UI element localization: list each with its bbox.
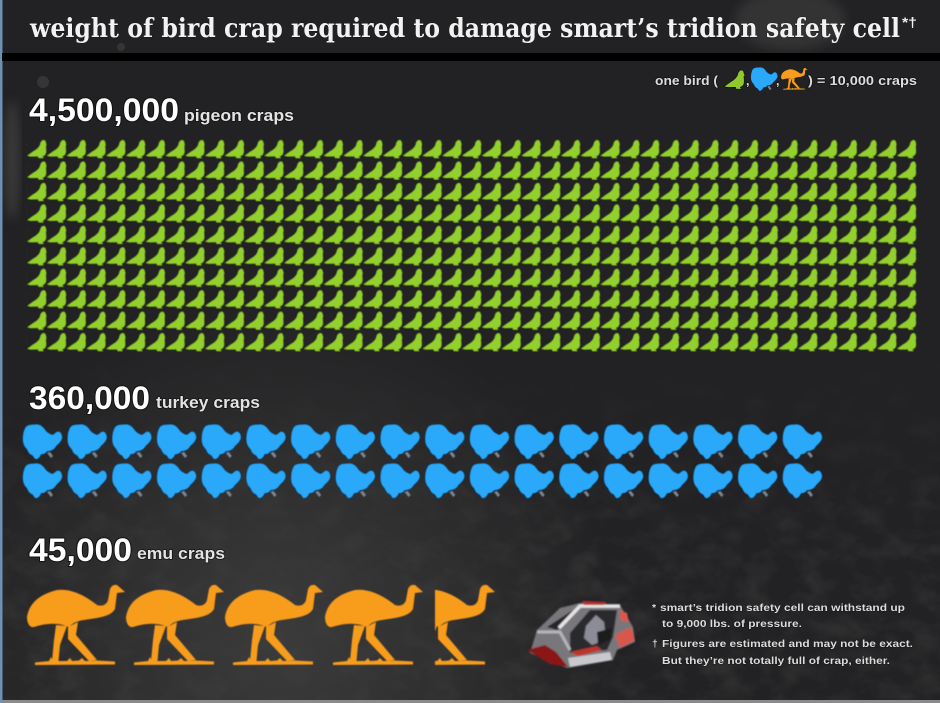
title bar	[2, 53, 940, 61]
footnote: figures are estimated: †	[652, 638, 658, 650]
heading: pigeon craps: 4,500,000	[29, 92, 179, 128]
pigeon grid: 45 columns by 10 rows	[27, 140, 916, 354]
legend: one bird equals 10,000 craps: ,	[746, 74, 749, 88]
icon: emu	[781, 68, 807, 90]
image: smart tridion safety cell	[527, 601, 635, 668]
title: *†	[902, 14, 917, 30]
heading: pigeon craps	[29, 92, 294, 128]
footnotes	[652, 602, 913, 667]
emu row: four and a half emus	[27, 585, 495, 665]
heading: emu craps	[29, 532, 225, 568]
heading: pigeon craps: pigeon craps	[184, 107, 294, 125]
turkey grid: 18 columns by 2 rows	[23, 424, 822, 498]
icon: turkey	[751, 67, 778, 91]
heading: turkey craps: turkey craps	[156, 394, 260, 412]
heading: turkey craps	[29, 380, 260, 416]
heading: emu craps: emu craps	[137, 545, 225, 563]
footnote: safety cell pressure: smart’s tridion safety cell can withstand up	[660, 602, 905, 614]
legend: one bird equals 10,000 craps: ) = 10,000 craps	[808, 74, 917, 88]
footnote: figures are estimated: But they’re not totally full of crap, either.	[662, 655, 890, 667]
heading: turkey craps: 360,000	[29, 380, 150, 416]
footnote: figures are estimated: Figures are estimated and may not be exact.	[662, 638, 913, 650]
icon: pigeon	[724, 70, 745, 89]
legend: one bird equals 10,000 craps	[655, 67, 917, 91]
footnote: figures are estimated	[652, 638, 913, 667]
footnote: safety cell pressure	[652, 602, 905, 630]
legend: one bird equals 10,000 craps: one bird (	[655, 74, 719, 88]
footnote: safety cell pressure: *	[652, 602, 657, 614]
footnote: safety cell pressure: to 9,000 lbs. of pressure.	[662, 618, 802, 630]
legend: one bird equals 10,000 craps: ,	[776, 74, 779, 88]
heading: emu craps: 45,000	[29, 532, 132, 568]
